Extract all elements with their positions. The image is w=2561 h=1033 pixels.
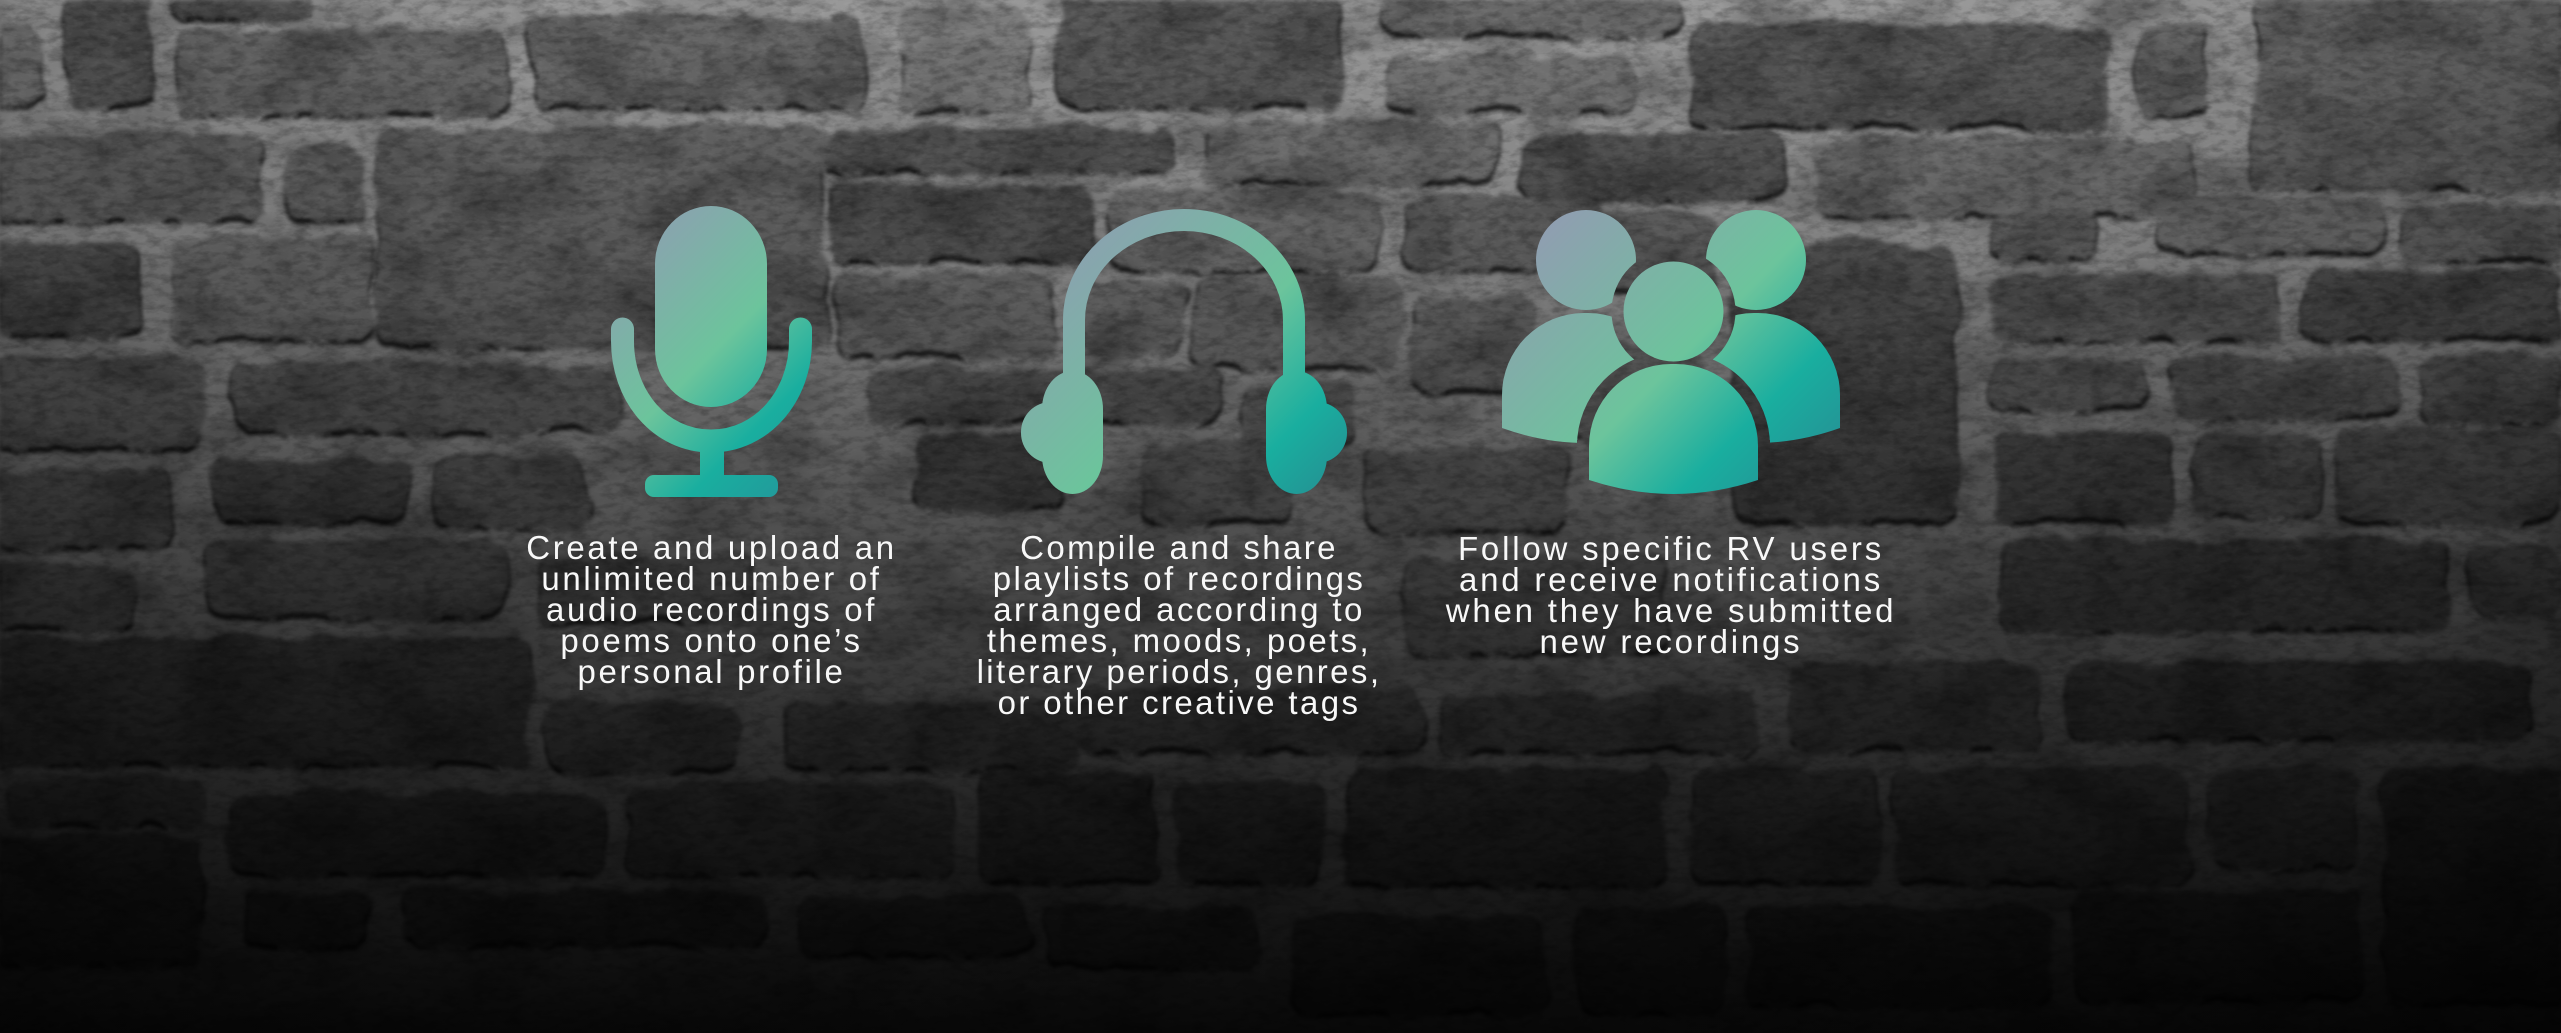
text: follow users: and receive notifications	[1459, 561, 1883, 598]
text: compile and share: themes, moods, poets,	[987, 622, 1371, 659]
text: compile and share: Compile and share	[1020, 529, 1338, 566]
icon: group of three people	[1502, 210, 1840, 494]
text: create and upload: unlimited number of	[541, 560, 882, 597]
panel: create and upload recordings	[526, 206, 897, 690]
text: follow users: Follow specific RV users	[1458, 530, 1884, 567]
text: compile and share	[977, 529, 1381, 721]
text: compile and share: or other creative tags	[998, 684, 1360, 721]
text: follow users	[1446, 530, 1896, 660]
panel: compile and share playlists	[977, 209, 1381, 721]
panel: follow users	[1446, 210, 1896, 660]
text: create and upload: poems onto one’s	[560, 622, 863, 659]
text: create and upload: audio recordings of	[546, 591, 877, 628]
icon: headphones	[1021, 209, 1347, 494]
text: create and upload: Create and upload an	[526, 529, 897, 566]
text: follow users: new recordings	[1540, 623, 1802, 660]
text: create and upload	[526, 529, 897, 690]
text: follow users: when they have submitted	[1446, 592, 1896, 629]
icon: microphone	[611, 206, 812, 497]
text: compile and share: playlists of recordings	[993, 560, 1365, 597]
text: create and upload: personal profile	[577, 653, 846, 690]
text: compile and share: literary periods, genres,	[977, 653, 1381, 690]
text: compile and share: arranged according to	[993, 591, 1365, 628]
